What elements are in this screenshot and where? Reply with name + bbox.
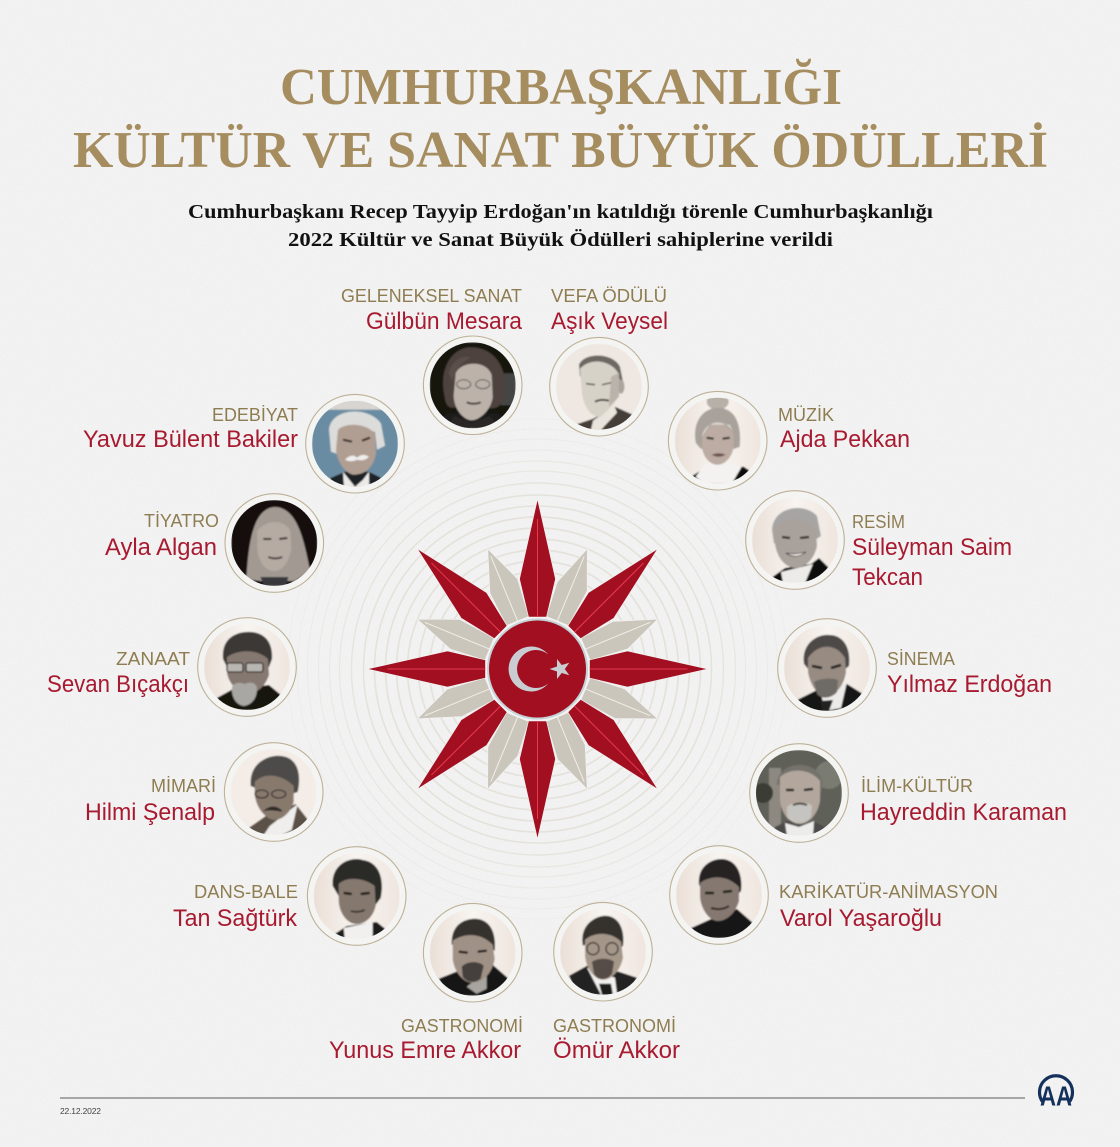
- portrait: Gülbün Mesara: [423, 336, 522, 435]
- category label: TİYATRO: [144, 511, 219, 531]
- title: [73, 58, 1048, 179]
- portrait: Hayreddin Karaman: [750, 744, 848, 842]
- category label: SİNEMA: [887, 649, 955, 669]
- central star emblem: [368, 499, 708, 839]
- winner: Süleyman Saim Tekcan: [746, 491, 1012, 591]
- winner: Tan Sağtürk: [173, 847, 406, 945]
- winner: Yılmaz Erdoğan: [778, 619, 1052, 717]
- category label: VEFA ÖDÜLÜ: [551, 286, 667, 306]
- winner: Ömür Akkor: [553, 902, 680, 1064]
- portrait: Yılmaz Erdoğan: [778, 619, 876, 717]
- title: CUMHURBAŞKANLIĞI: [280, 58, 842, 116]
- winner name: Süleyman Saim: [852, 534, 1012, 561]
- winner name: Yılmaz Erdoğan: [887, 671, 1052, 698]
- portrait: Ömür Akkor: [554, 902, 652, 1001]
- portrait: Yunus Emre Akkor: [423, 903, 522, 1002]
- winner: Yavuz Bülent Bakiler: [83, 394, 404, 493]
- winner name: Sevan Bıçakçı: [47, 671, 189, 698]
- winner name: Gülbün Mesara: [366, 308, 523, 335]
- subtitle: [188, 201, 933, 251]
- portrait: Süleyman Saim Tekcan: [746, 491, 844, 589]
- category label: DANS-BALE: [194, 882, 298, 902]
- winner: Aşık Veysel: [550, 286, 668, 436]
- logo: AA: AA: [1040, 1080, 1072, 1112]
- winner name: Tekcan: [852, 564, 923, 591]
- title: KÜLTÜR VE SANAT BÜYÜK ÖDÜLLERİ: [73, 122, 1048, 179]
- winner: Ayla Algan: [105, 494, 324, 592]
- portrait: Hilmi Şenalp: [224, 743, 323, 841]
- portrait: Sevan Bıçakçı: [198, 618, 296, 716]
- category label: RESİM: [852, 512, 905, 532]
- portrait: Tan Sağtürk: [307, 847, 406, 945]
- subtitle: Cumhurbaşkanı Recep Tayyip Erdoğan'ın katıldığı törenle Cumhurbaşkanlığı: [188, 201, 933, 223]
- winner: Gülbün Mesara: [341, 286, 523, 435]
- category label: MİMARİ: [151, 776, 216, 796]
- portrait: Varol Yaşaroğlu: [670, 846, 768, 944]
- winner: Yunus Emre Akkor: [329, 903, 523, 1064]
- winner name: Yavuz Bülent Bakiler: [83, 426, 298, 453]
- category label: GELENEKSEL SANAT: [341, 286, 522, 306]
- footer rule: [60, 1097, 1025, 1099]
- portrait: Aşık Veysel: [550, 337, 648, 436]
- category label: İLİM-KÜLTÜR: [861, 776, 973, 796]
- winner: Hayreddin Karaman: [750, 744, 1067, 842]
- category label: GASTRONOMİ: [401, 1016, 523, 1036]
- portrait: Yavuz Bülent Bakiler: [306, 394, 404, 493]
- winner: Sevan Bıçakçı: [47, 618, 296, 716]
- winner name: Ayla Algan: [105, 534, 217, 561]
- category label: ZANAAT: [116, 649, 190, 669]
- portrait: Ayla Algan: [225, 494, 324, 592]
- category label: EDEBİYAT: [212, 405, 298, 425]
- subtitle: 2022 Kültür ve Sanat Büyük Ödülleri sahiplerine verildi: [288, 228, 833, 251]
- winner name: Aşık Veysel: [551, 308, 668, 335]
- icon: crescent and star: [509, 646, 569, 692]
- date: 22.12.2022: [60, 1106, 101, 1116]
- winner: Hilmi Şenalp: [85, 743, 323, 841]
- winner: Ajda Pekkan: [668, 391, 910, 490]
- winner name: Ajda Pekkan: [780, 426, 910, 453]
- winner name: Yunus Emre Akkor: [329, 1037, 521, 1064]
- winner name: Varol Yaşaroğlu: [780, 905, 942, 932]
- portrait: Ajda Pekkan: [668, 391, 767, 490]
- winner name: Ömür Akkor: [553, 1037, 680, 1064]
- winner: Varol Yaşaroğlu: [670, 846, 998, 944]
- winner name: Hilmi Şenalp: [85, 799, 215, 826]
- category label: MÜZİK: [778, 405, 834, 425]
- winner name: Hayreddin Karaman: [860, 799, 1067, 826]
- winner name: Tan Sağtürk: [173, 905, 298, 932]
- category label: GASTRONOMİ: [553, 1016, 676, 1036]
- category label: KARİKATÜR-ANİMASYON: [779, 882, 998, 902]
